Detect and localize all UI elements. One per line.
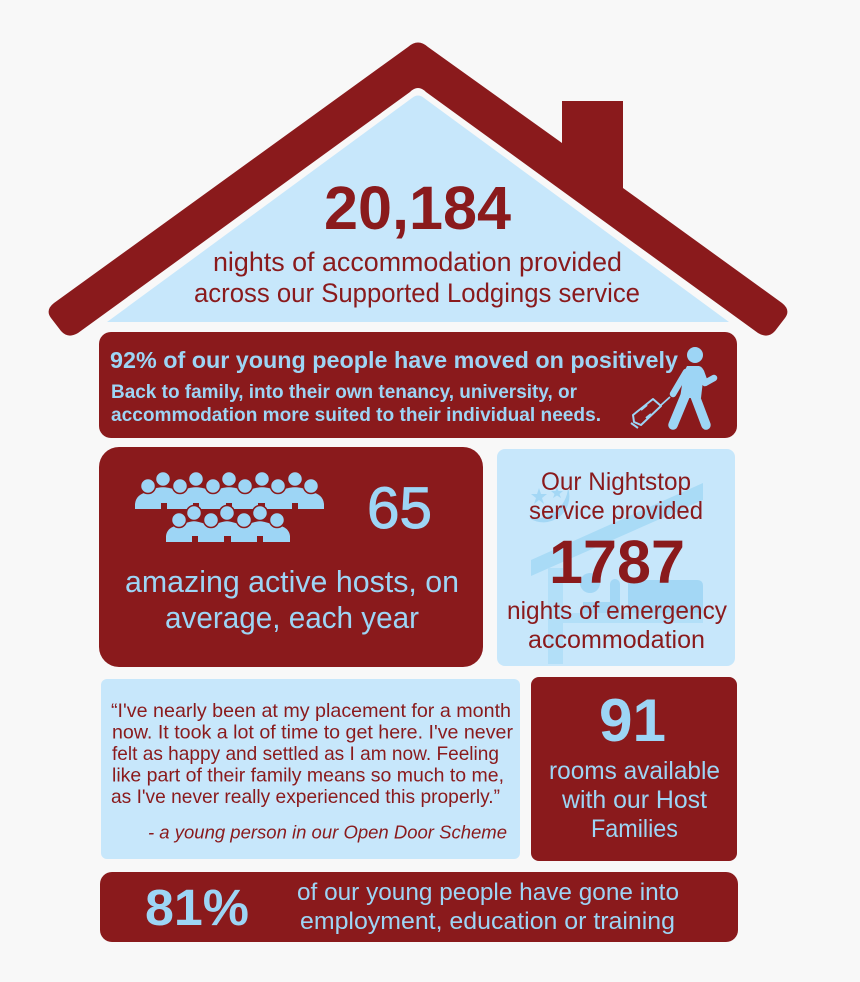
panel: quote: like part of their family means so much to me,	[112, 764, 504, 786]
panel: rooms available: Families	[591, 815, 678, 843]
icon: group of people	[135, 472, 324, 542]
description: amazing active hosts, on	[125, 564, 459, 599]
panel: rooms available: with our Host	[561, 786, 707, 814]
panel: Nightstop	[497, 449, 735, 666]
panel: Nightstop: service provided	[529, 497, 703, 525]
icon: moon, stars and bed watermark	[529, 483, 703, 664]
panel: moved on positively	[99, 332, 737, 438]
description: of our young people have gone into	[297, 879, 679, 906]
panel: moved on positively: accommodation more suited to their individual needs.	[111, 405, 601, 426]
panel: active hosts	[99, 447, 483, 667]
heading: 92% of our young people have moved on positively	[110, 347, 678, 373]
big number: 65	[367, 476, 432, 541]
panel: 20,184 nights: across our Supported Lodgings service	[194, 278, 640, 308]
panel: quote: as I've never really experienced this properly.”	[111, 786, 500, 808]
panel: 20,184 nights	[107, 96, 729, 322]
panel: rooms available	[531, 677, 737, 861]
big number: 20,184	[324, 174, 511, 242]
description: Back to family, into their own tenancy, university, or	[111, 382, 578, 403]
description: nights of accommodation provided	[213, 247, 622, 277]
quote text: “I've nearly been at my placement for a month	[111, 700, 511, 722]
panel: quote: now. It took a lot of time to get here. I've never	[112, 722, 514, 744]
house roof with chimney	[49, 42, 787, 336]
big number: 91	[599, 687, 666, 754]
panel: Nightstop: accommodation	[528, 626, 705, 654]
icon: traveller with suitcase	[631, 347, 714, 428]
panel: quote	[101, 679, 520, 859]
panel: employment, education or training	[100, 872, 738, 942]
description: rooms available	[549, 757, 720, 785]
attribution: - a young person in our Open Door Scheme	[148, 822, 507, 842]
big number: 1787	[549, 528, 685, 596]
panel: quote: felt as happy and settled as I am now. Feeling	[112, 743, 499, 765]
big number: 81%	[145, 879, 249, 936]
intro text: Our Nightstop	[541, 468, 691, 496]
description: nights of emergency	[507, 597, 727, 625]
panel: employment, education or training: employment, education or training	[300, 908, 675, 935]
attic background	[107, 96, 729, 322]
panel: active hosts: average, each year	[165, 600, 419, 635]
